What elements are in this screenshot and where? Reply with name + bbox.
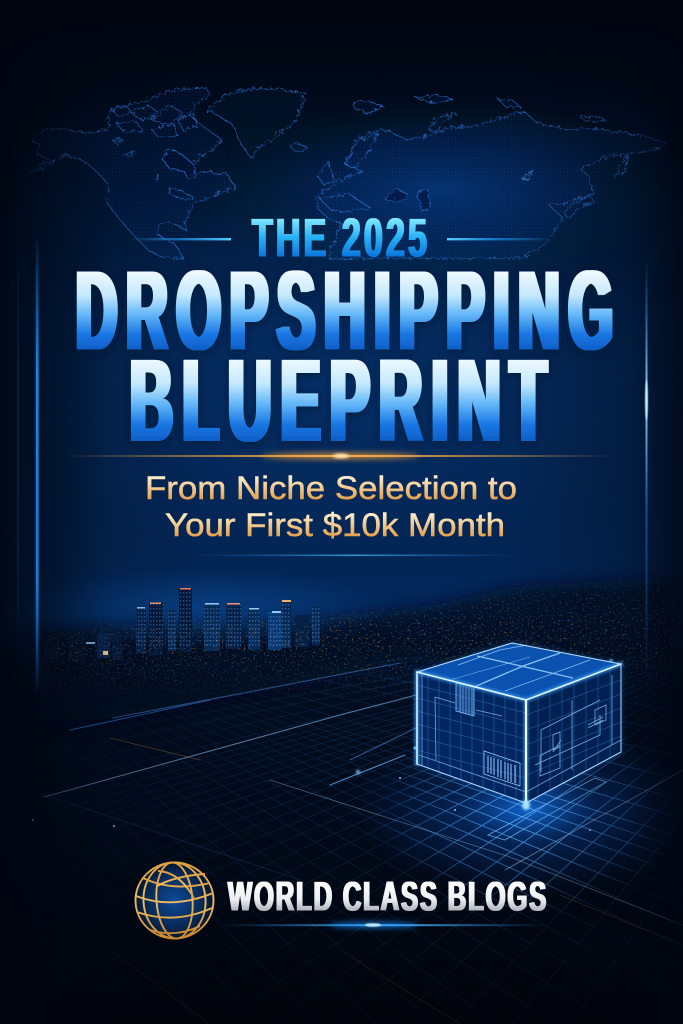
tower windows	[136, 588, 320, 649]
map dot texture	[30, 86, 666, 257]
dark city mass	[40, 578, 683, 720]
buildings	[43, 588, 320, 660]
right face grid	[526, 668, 621, 796]
skyline haze	[10, 568, 390, 648]
brand logo and name	[136, 860, 548, 941]
left face grid	[417, 675, 526, 799]
line one: From Niche Selection to	[145, 470, 517, 506]
bright edges	[417, 643, 621, 803]
line two: Your First $10k Month	[165, 507, 505, 543]
box faces	[417, 672, 526, 803]
blueprint marks	[435, 675, 612, 776]
shipping label	[456, 683, 474, 716]
base inner lines	[419, 740, 621, 792]
floor grid	[8, 653, 683, 1024]
grid lines fine	[64, 653, 681, 1024]
distant bright marker	[609, 659, 613, 666]
subtitle	[145, 470, 517, 543]
rule right	[447, 238, 550, 240]
base flare	[522, 800, 530, 810]
icon: gold globe	[136, 860, 214, 941]
world map	[28, 86, 680, 280]
rooftop lights	[86, 588, 291, 655]
city skyline	[10, 560, 683, 720]
barcode	[484, 751, 520, 786]
gold divider	[65, 453, 615, 459]
land masses	[28, 86, 666, 257]
city lights	[40, 574, 683, 700]
shipping box wireframe	[417, 643, 621, 810]
lower blue rule	[190, 554, 520, 556]
top face lines	[450, 645, 590, 691]
rule left	[130, 238, 231, 240]
bright floor lines	[0, 663, 683, 1024]
blue underline	[222, 924, 547, 926]
box glow	[417, 643, 621, 803]
vertical light streaks	[18, 235, 648, 695]
text: THE 2025	[252, 206, 430, 268]
floor sparkles	[32, 746, 591, 831]
bright grid near box	[389, 744, 660, 914]
